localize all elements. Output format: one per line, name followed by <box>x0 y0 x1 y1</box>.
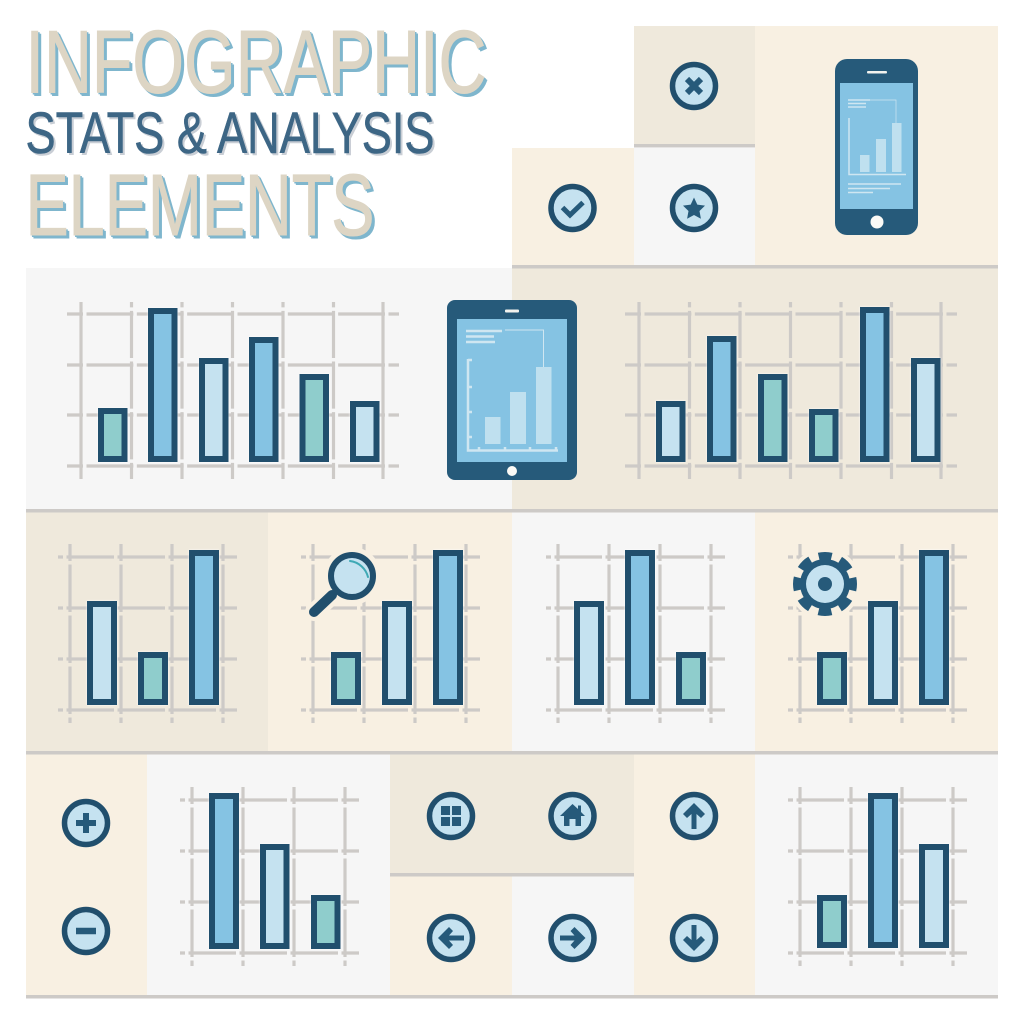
title: ELEMENTS <box>28 160 378 257</box>
bars <box>820 553 946 702</box>
icon: tablet with chart <box>447 300 577 480</box>
icon: grid menu button <box>430 794 472 838</box>
title: STATS & ANALYSIS <box>26 101 434 166</box>
title: ELEMENTS <box>27 158 376 256</box>
icon: plus button <box>64 802 108 844</box>
title: INFOGRAPHIC <box>27 13 488 113</box>
title: INFOGRAPHIC <box>26 12 486 112</box>
title: STATS & ANALYSIS <box>28 103 436 168</box>
bars <box>659 310 938 459</box>
bars <box>577 553 703 702</box>
bars <box>212 796 338 946</box>
icon: left arrow button <box>430 916 472 960</box>
bars <box>90 553 216 702</box>
icon: right arrow button <box>551 916 594 960</box>
chart: rising bars with magnifier <box>301 544 480 723</box>
bars <box>820 796 946 945</box>
chart: descending bars <box>180 787 359 966</box>
icon: home button <box>551 794 594 838</box>
icon: magnifier <box>314 547 381 612</box>
title <box>26 12 490 257</box>
icon: up arrow button <box>672 794 716 838</box>
icon: star button <box>672 186 716 230</box>
icon: down arrow button <box>672 916 716 960</box>
icon: close button <box>672 64 716 108</box>
chart: six-bar chart, beige panel <box>625 302 957 479</box>
bars <box>101 311 376 459</box>
chart: three-bar chart, bottom right <box>788 787 967 966</box>
title: ELEMENTS <box>26 157 374 254</box>
icon: smartphone with chart <box>835 59 918 235</box>
bars <box>334 553 460 702</box>
icon: check button <box>551 186 594 230</box>
chart: rising bars with gear <box>788 544 967 723</box>
chart: six-bar chart, white panel <box>67 302 399 479</box>
icon: gear <box>789 548 861 620</box>
chart: three-bar chart, up-down-up <box>58 544 237 723</box>
title: INFOGRAPHIC <box>28 14 490 114</box>
chart: three-bar chart on white <box>546 544 725 723</box>
icon: minus button <box>64 910 108 952</box>
